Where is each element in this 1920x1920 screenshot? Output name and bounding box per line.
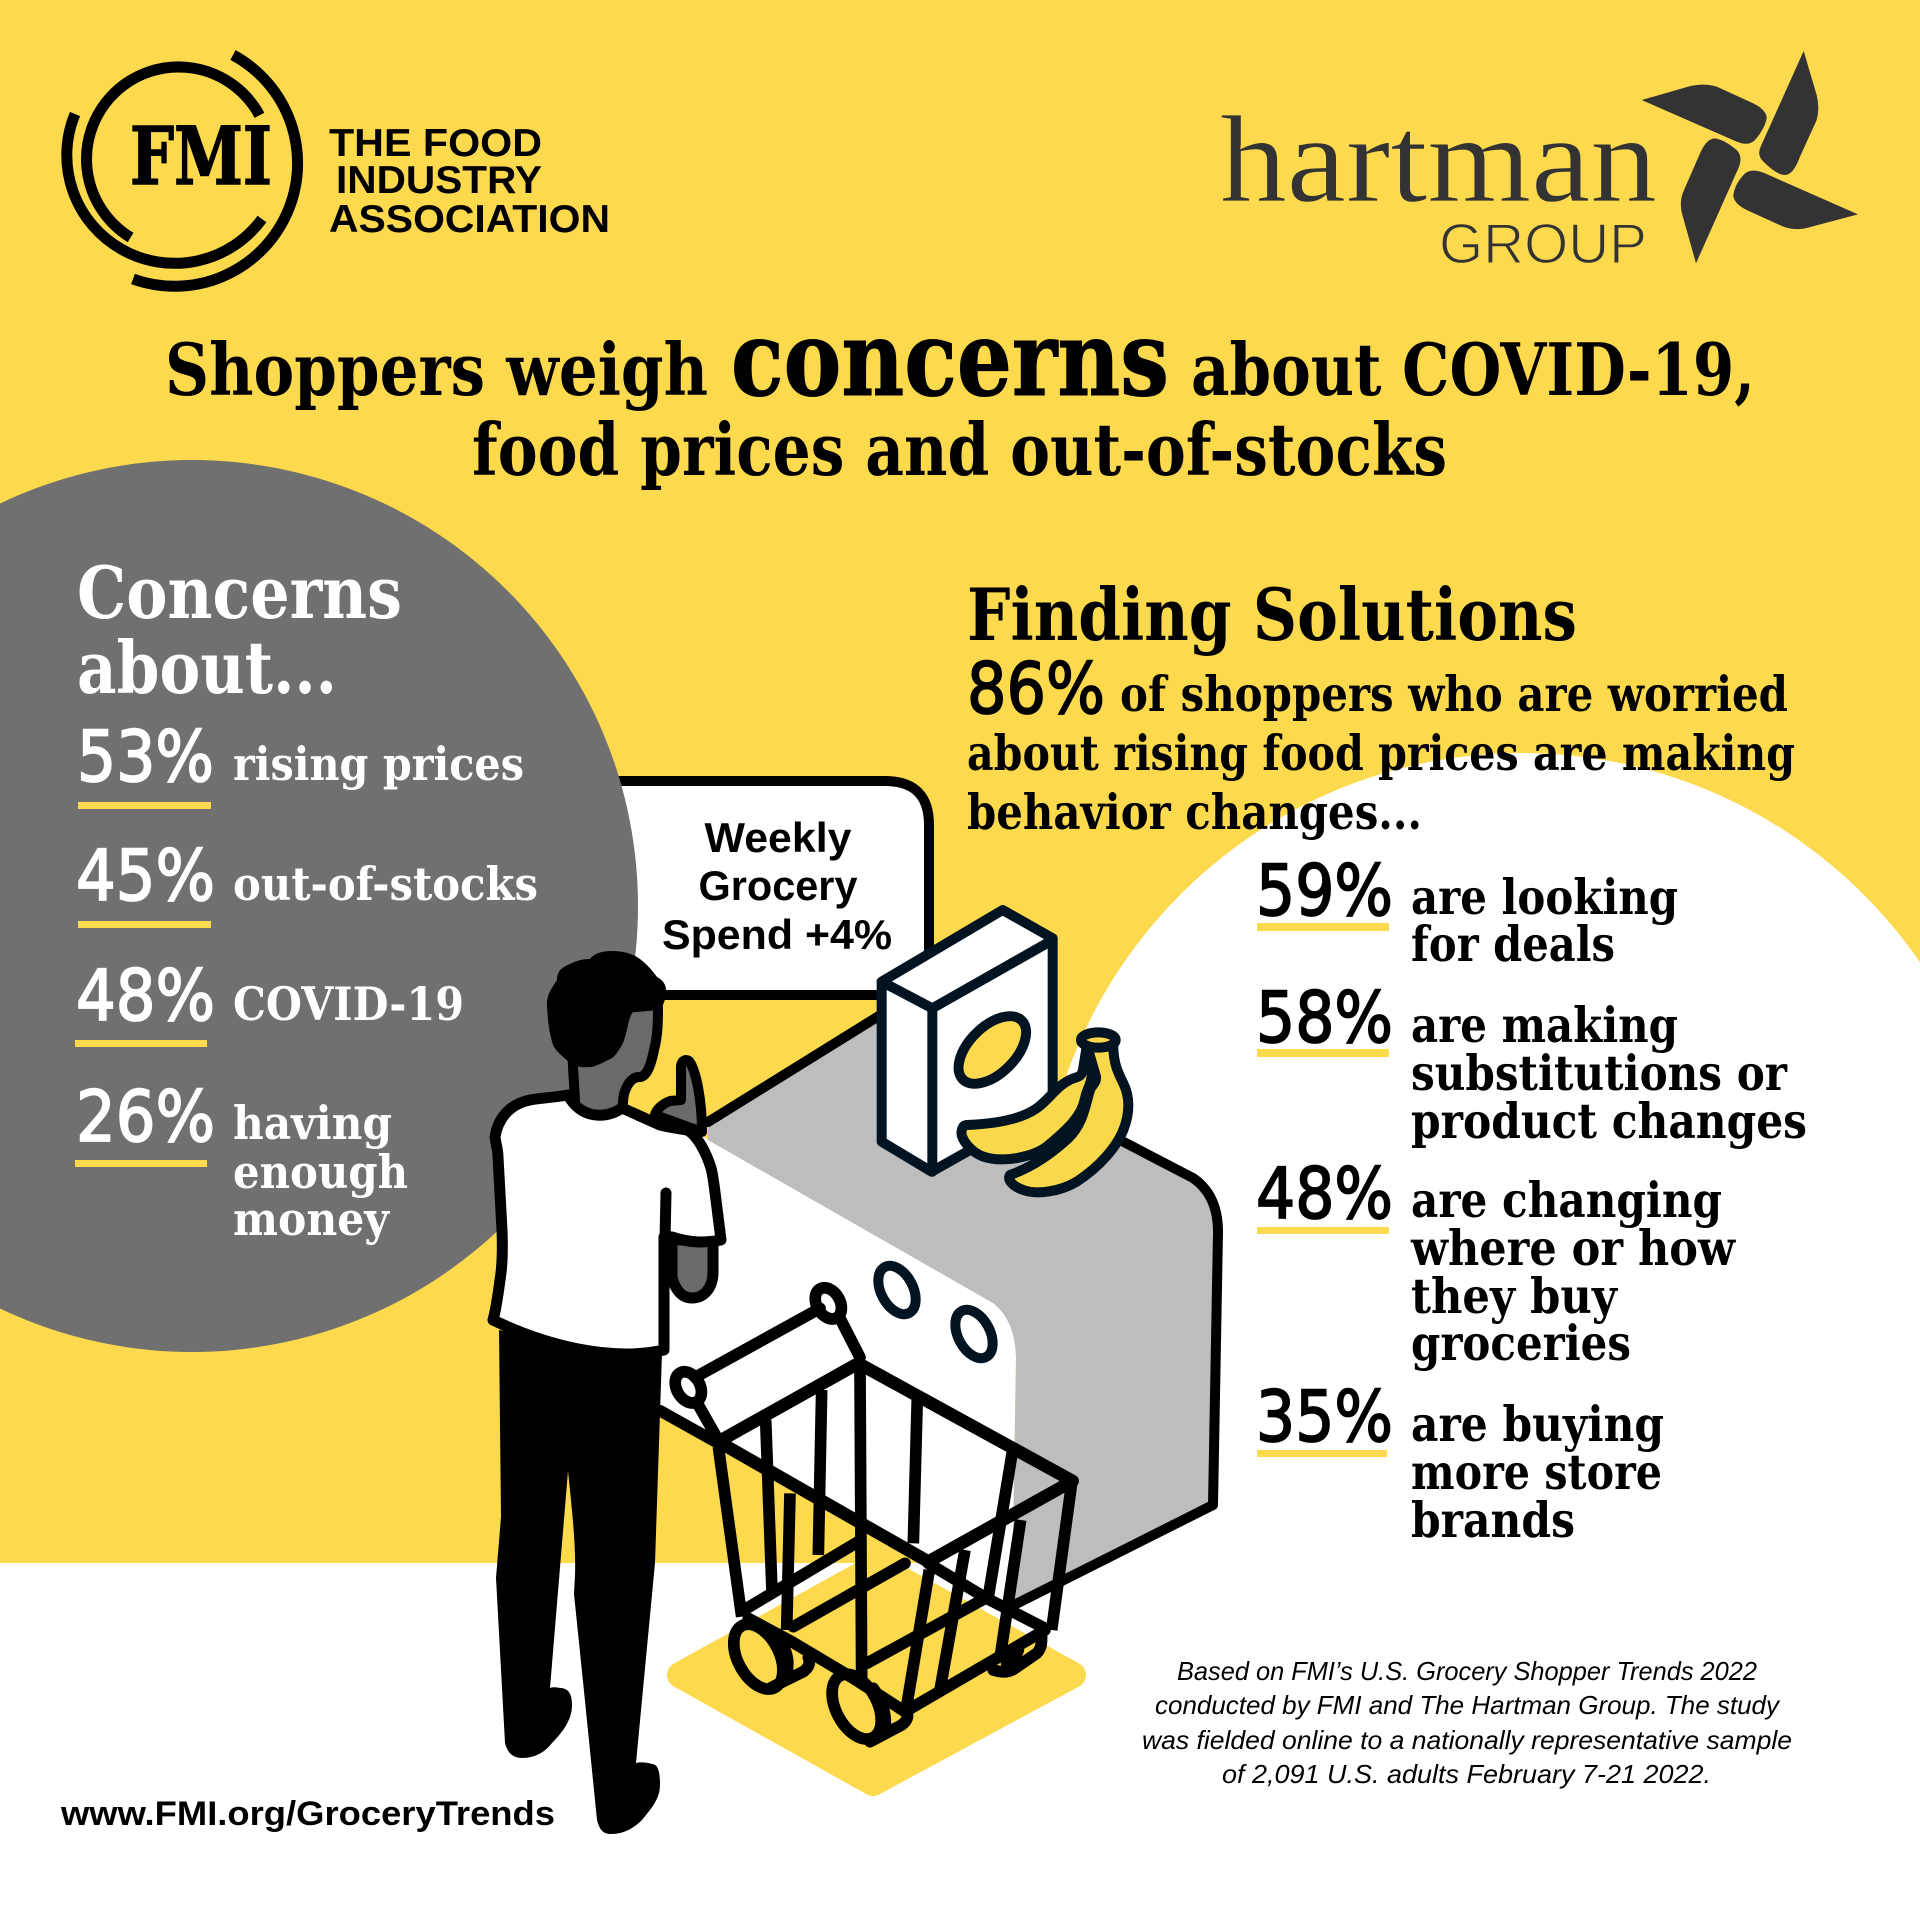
solution: 48% changing where or how: they buy: [1411, 1267, 1618, 1325]
concern: 45% out-of-stocks: [76, 835, 538, 928]
sign text: [662, 814, 892, 958]
logo wordmark: [329, 122, 610, 241]
solution: 58% substitutions: 58%: [1256, 977, 1393, 1059]
solution: 48% changing where or how: are changing: [1411, 1171, 1722, 1229]
raised hand: [655, 1060, 702, 1132]
solution: 35% store brands: are buying: [1411, 1395, 1664, 1453]
concern: 45% out-of-stocks: out-of-stocks: [233, 857, 538, 911]
solution: 59% looking for deals: for deals: [1411, 915, 1615, 973]
concern: 48% COVID-19: [75, 955, 464, 1047]
concerns heading: about...: [77, 625, 337, 710]
solution: 48% changing where or how: 48%: [1256, 1153, 1393, 1235]
white arc background: [1039, 753, 1920, 1719]
logo rings: [67, 55, 298, 286]
panel: finding solutions intro: Finding Solutions: [967, 572, 1577, 657]
weekly spend sign: [500, 781, 929, 995]
Hartman Group logo: [1220, 51, 1858, 276]
logo wordmark: THE FOOD: [329, 122, 542, 165]
sign text: Grocery: [698, 862, 858, 909]
concern: 53% rising prices: 53%: [77, 716, 214, 798]
solution: 48% changing where or how: [1256, 1153, 1737, 1372]
hartman wordmark: hartman: [1220, 91, 1657, 228]
logo wordmark: INDUSTRY: [336, 159, 542, 202]
concerns heading: Concerns: [77, 550, 402, 635]
solution: 35% store brands: brands: [1411, 1491, 1575, 1549]
sign text: Spend +4%: [662, 911, 892, 958]
title: about COVID-19,: [1191, 327, 1755, 412]
logo wordmark: ASSOCIATION: [329, 198, 610, 241]
solution: 58% substitutions: substitutions or: [1411, 1044, 1788, 1102]
banana stem: [1081, 1032, 1116, 1048]
shirt arm line: [665, 1193, 666, 1240]
cart rungs: [747, 1542, 988, 1663]
logo monogram: FMI: [130, 109, 272, 203]
neck: [568, 1005, 658, 1117]
title: Shoppers weigh: [165, 327, 708, 412]
solution: 48% changing where or how: groceries: [1411, 1314, 1631, 1372]
counter oval buttons: [871, 1260, 1000, 1364]
solution: 35% store brands: 35%: [1256, 1376, 1393, 1458]
arm: [672, 1240, 713, 1298]
concern: 26% having enough money: having: [233, 1096, 392, 1150]
panel: finding solutions intro: of shoppers who are worried: [1120, 665, 1788, 723]
solution: 48% changing where or how: where or how: [1410, 1219, 1737, 1277]
source footnote: [1142, 1656, 1792, 1789]
concern: 53% rising prices: rising prices: [233, 737, 524, 791]
hair: [547, 951, 666, 1067]
concern: 45% out-of-stocks: 45%: [76, 835, 215, 917]
solution: 59% looking for deals: [1256, 850, 1678, 973]
cart basket rim: [718, 1363, 1073, 1562]
solution: 58% substitutions: product changes: [1411, 1092, 1807, 1150]
panel: concerns circle: [0, 460, 638, 1352]
counter base line seen through cart: [660, 1411, 1045, 1628]
cereal box and bananas: [882, 910, 1128, 1192]
solution: 58% substitutions: are making: [1411, 996, 1678, 1054]
box logo ring: [946, 1004, 1038, 1096]
solution: 59% looking for deals: are looking: [1411, 868, 1678, 926]
floor mat: [680, 1566, 1073, 1783]
counter gray top: [708, 1016, 1218, 1606]
cart wires: [718, 1367, 1072, 1710]
cart base: [748, 1618, 1045, 1712]
concern: 48% COVID-19: COVID-19: [233, 977, 464, 1031]
cereal box: [882, 910, 1053, 1172]
source footnote: conducted by FMI and The Hartman Group. The study: [1155, 1690, 1781, 1720]
title: concerns: [731, 297, 1169, 420]
concern: 26% having enough money: [75, 1076, 408, 1246]
concern: 53% rising prices: [77, 716, 524, 809]
solution: 35% store brands: [1256, 1376, 1664, 1549]
solution: 59% looking for deals: 59%: [1256, 850, 1393, 932]
concern: 26% having enough money: enough: [233, 1145, 408, 1199]
group wordmark: GROUP: [1439, 212, 1647, 276]
panel: finding solutions intro: 86%: [967, 648, 1105, 730]
shopper: [493, 951, 721, 1834]
concern: 26% having enough money: 26%: [76, 1076, 215, 1158]
concern: 48% COVID-19: 48%: [76, 955, 215, 1037]
counter outline: [708, 1014, 1218, 1607]
solution: 35% store brands: more store: [1411, 1443, 1662, 1501]
FMI logo: [67, 55, 610, 286]
cart handle: [670, 1283, 860, 1438]
title: [165, 297, 1755, 492]
cart wheels: [724, 1616, 1042, 1747]
source footnote: of 2,091 U.S. adults February 7-21 2022.: [1222, 1759, 1711, 1789]
title: food prices and out-of-stocks: [472, 407, 1447, 492]
concern: 26% having enough money: money: [233, 1192, 390, 1246]
checkout counter: [660, 1014, 1218, 1607]
pants: [496, 1330, 662, 1834]
panel: finding solutions intro: [967, 572, 1795, 841]
pinwheel icon: [1642, 51, 1858, 263]
shopping cart: [660, 1283, 1073, 1747]
source footnote: Based on FMI’s U.S. Grocery Shopper Trends 2022: [1177, 1656, 1758, 1686]
website url: www.FMI.org/GroceryTrends: [60, 1795, 555, 1833]
concerns heading: [77, 550, 402, 710]
counter white face: [660, 1100, 1016, 1606]
bananas: [961, 1032, 1128, 1192]
solution: 58% substitutions: [1256, 977, 1807, 1150]
sign text: Weekly: [704, 814, 852, 861]
panel: finding solutions intro: behavior changes...: [967, 783, 1422, 841]
source footnote: was fielded online to a nationally representative sample: [1142, 1725, 1792, 1755]
t-shirt: [493, 1095, 721, 1354]
